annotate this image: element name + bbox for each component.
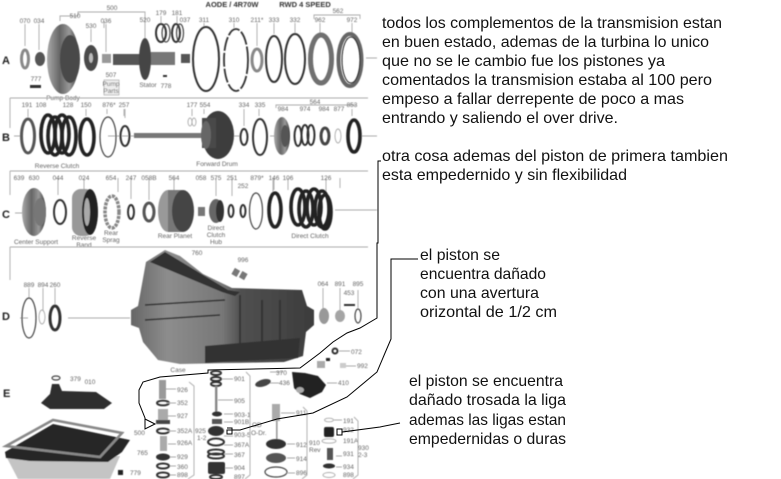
row A parts: 500 <box>107 5 118 12</box>
text block: damaged piston: con una avertura <box>420 285 539 302</box>
row A parts: 333 <box>269 17 280 24</box>
transmission case <box>131 250 314 364</box>
row A parts: 036 <box>101 18 112 25</box>
row D parts <box>2 247 368 364</box>
row C parts: 024 <box>79 175 90 182</box>
row E parts: 360 <box>177 464 188 471</box>
text block: first piston <box>382 148 728 184</box>
row A parts: 037 <box>180 17 191 24</box>
row A parts: 777 <box>31 76 42 83</box>
row E parts: 2-3 <box>358 452 368 459</box>
text block: damaged piston: el piston se <box>420 247 500 264</box>
row E parts: 929 <box>177 454 188 461</box>
row D parts: 889 <box>24 282 35 289</box>
row A parts: A <box>2 55 10 67</box>
row E parts: 370 <box>276 370 287 377</box>
row E parts: 072 <box>351 349 362 356</box>
text block: general condition: todos los complementos de la transmision estan <box>382 15 722 32</box>
row E parts: 926 <box>177 387 188 394</box>
row D parts: 260 <box>50 282 61 289</box>
row C parts: Reverse <box>72 235 96 242</box>
row E parts: 926A <box>177 440 193 447</box>
row B parts: 257 <box>119 102 130 109</box>
row C parts: Rear <box>104 230 119 237</box>
row E parts: Case <box>170 367 186 374</box>
row B parts: 876* <box>102 102 116 109</box>
row D parts: 760 <box>192 250 203 257</box>
row A parts: 070 <box>20 18 31 25</box>
text block: damaged piston: orizontal de 1/2 cm <box>420 304 557 321</box>
row E parts: 010 <box>85 379 96 386</box>
text block: damaged piston: encuentra dañado <box>420 266 546 283</box>
row B parts: 108 <box>36 102 47 109</box>
row E parts: 500 <box>134 430 145 437</box>
row C parts: Band <box>76 242 92 249</box>
row A parts: 507 <box>106 72 117 79</box>
row E parts: 367 <box>234 452 245 459</box>
text block: general condition: comentados la transmision estaba al 100 pero <box>382 72 712 89</box>
row B parts <box>2 98 377 170</box>
row E parts: 901 <box>234 376 245 383</box>
row C parts: Direct <box>208 225 225 232</box>
row E parts: 410 <box>338 380 349 387</box>
row A parts: 332 <box>290 17 301 24</box>
row E parts: 896 <box>296 470 307 477</box>
row E parts: 911 <box>296 410 307 417</box>
row E parts: E <box>3 388 10 400</box>
row A parts: 311 <box>199 17 210 24</box>
row E parts: 779 <box>130 470 141 477</box>
row C parts: C <box>2 209 10 221</box>
row E parts: 904 <box>234 465 245 472</box>
oil pan <box>6 456 120 479</box>
row A parts: Pump Body <box>46 95 81 102</box>
row D parts: 064 <box>318 281 329 288</box>
valve body <box>292 372 326 398</box>
row C parts: 058 <box>196 175 207 182</box>
row B parts: 334 <box>239 102 250 109</box>
row C parts: Direct Clutch <box>291 233 329 240</box>
row C parts: Center Support <box>14 239 58 246</box>
text block: torn band: empedernidas o duras <box>409 431 566 448</box>
row B parts: Forward Drum <box>196 161 238 168</box>
row E parts: 910 <box>309 440 320 447</box>
row C parts: Rear Planet <box>158 233 192 240</box>
row B parts: B <box>2 132 10 144</box>
row C parts: Hub <box>210 239 222 246</box>
row E parts: 379 <box>70 376 81 383</box>
row B parts: 191 <box>22 102 33 109</box>
row B parts: 554 <box>200 102 211 109</box>
row C parts: 575 <box>211 175 222 182</box>
row B parts: 335 <box>255 102 266 109</box>
row A parts: Stator <box>139 82 158 89</box>
row B parts: 564 <box>310 99 321 106</box>
text block: general condition <box>382 15 722 127</box>
text block: torn band: ademas las ligas estan <box>409 412 566 429</box>
center servo stack <box>211 371 221 375</box>
row A parts: 520 <box>140 17 151 24</box>
row B parts: 150 <box>81 102 92 109</box>
right servo stack <box>272 404 280 421</box>
row A parts: 778 <box>161 83 172 90</box>
text block: general condition: empeso a fallar derrepente de poco a mas <box>382 91 684 108</box>
text block: damaged piston <box>420 247 557 321</box>
row C parts: 564 <box>169 175 180 182</box>
text block: general condition: en buen estado, ademas de la turbina lo unico <box>382 34 709 51</box>
row A parts: Parts <box>103 88 119 95</box>
text block: torn band <box>409 373 566 448</box>
row D parts: 895 <box>353 281 364 288</box>
callout leader: damaged piston <box>227 259 418 434</box>
row A parts: 530 <box>86 23 97 30</box>
left servo stack <box>159 380 166 399</box>
row E parts: O-Dr. <box>251 430 267 437</box>
row E parts: 927 <box>177 413 188 420</box>
row E parts: 191 <box>343 418 354 425</box>
row C parts: Clutch <box>207 232 226 239</box>
row B parts: 974 <box>300 106 311 113</box>
text block: first piston: esta empedernido y sin flexibilidad <box>382 167 627 184</box>
row C parts: 146 <box>269 175 280 182</box>
exploded transmission diagram <box>2 0 377 479</box>
row E parts: 352 <box>177 400 188 407</box>
row E parts: 992 <box>357 363 368 370</box>
row E parts: 898 <box>343 472 354 479</box>
row A parts: 034 <box>34 18 45 25</box>
row B parts: 984 <box>278 106 289 113</box>
far right servo stack <box>324 418 334 422</box>
row C parts <box>2 171 377 249</box>
title: drive type: RWD 4 SPEED <box>279 0 331 9</box>
row E parts <box>3 348 369 479</box>
row E parts: 925 <box>195 428 206 435</box>
row C parts: 630 <box>29 175 40 182</box>
row A parts: Pump <box>103 81 120 88</box>
row E parts: Rev <box>309 447 321 454</box>
row A parts: 962 <box>315 17 326 24</box>
row E parts: 352A <box>177 428 193 435</box>
row A parts: 211* <box>251 17 264 24</box>
row E parts: 191A <box>343 438 359 445</box>
callout leader: torn band <box>337 423 400 435</box>
row B parts: 984 <box>319 106 330 113</box>
row E parts: 914 <box>296 456 307 463</box>
row E parts: 898 <box>177 472 188 479</box>
row A parts: 972 <box>347 17 358 24</box>
row D parts: 891 <box>335 281 346 288</box>
text block: first piston: otra cosa ademas del piston de primera tambien <box>382 148 728 165</box>
row B parts: 853 <box>347 102 358 109</box>
row C parts: 247 <box>126 175 137 182</box>
row E parts: 930 <box>358 445 369 452</box>
row E parts: 912 <box>296 442 307 449</box>
row C parts: 126 <box>321 175 332 182</box>
row E parts: 1-2 <box>197 435 207 442</box>
row A parts: 310 <box>229 17 240 24</box>
row B parts: 177 <box>187 102 198 109</box>
row E parts: 903-5 <box>234 432 251 439</box>
row E parts: 901B <box>234 419 249 426</box>
row A parts: 179 <box>156 10 167 17</box>
row D parts: 453 <box>344 290 355 297</box>
row C parts: 654 <box>106 175 117 182</box>
row C parts: 251 <box>227 175 238 182</box>
filter <box>41 384 112 409</box>
row E parts: 934 <box>343 464 354 471</box>
row E parts: 931 <box>343 451 354 458</box>
row E parts: OD <box>252 422 262 429</box>
row B parts: Reverse Clutch <box>35 163 80 170</box>
title: model: AODE / 4R70W <box>206 0 259 9</box>
text block: general condition: entrando y saliendo el over drive. <box>382 110 618 127</box>
row E parts: 436 <box>279 380 290 387</box>
row C parts: 106 <box>283 175 294 182</box>
callout leader: first piston <box>139 161 381 429</box>
row C parts: 879* <box>250 175 264 182</box>
row E parts: 367A <box>234 442 250 449</box>
row E parts: 932 <box>343 427 354 434</box>
row D parts: 996 <box>238 257 249 264</box>
row A parts: 510 <box>70 13 81 20</box>
text block: general condition: que no se le cambio fue los pistones ya <box>382 53 665 70</box>
row A parts <box>2 5 377 102</box>
row A parts: 562 <box>333 8 344 15</box>
row C parts: 639 <box>14 175 25 182</box>
row D parts: D <box>2 311 10 323</box>
row B parts: 877 <box>334 106 345 113</box>
row C parts: 044 <box>53 175 64 182</box>
row A parts: 181 <box>172 10 183 17</box>
row C parts: Sprag <box>102 237 120 244</box>
row C parts: 058B <box>141 175 157 182</box>
row C parts: 252 <box>238 183 249 190</box>
text block: torn band: dañado trosada la liga <box>409 392 566 409</box>
row D parts: 894 <box>38 282 49 289</box>
row E parts: 903-1 <box>234 412 251 419</box>
text block: torn band: el piston se encuentra <box>409 373 563 390</box>
row B parts: 128 <box>63 102 74 109</box>
row E parts: 765 <box>137 450 148 457</box>
row E parts: 905 <box>234 398 245 405</box>
